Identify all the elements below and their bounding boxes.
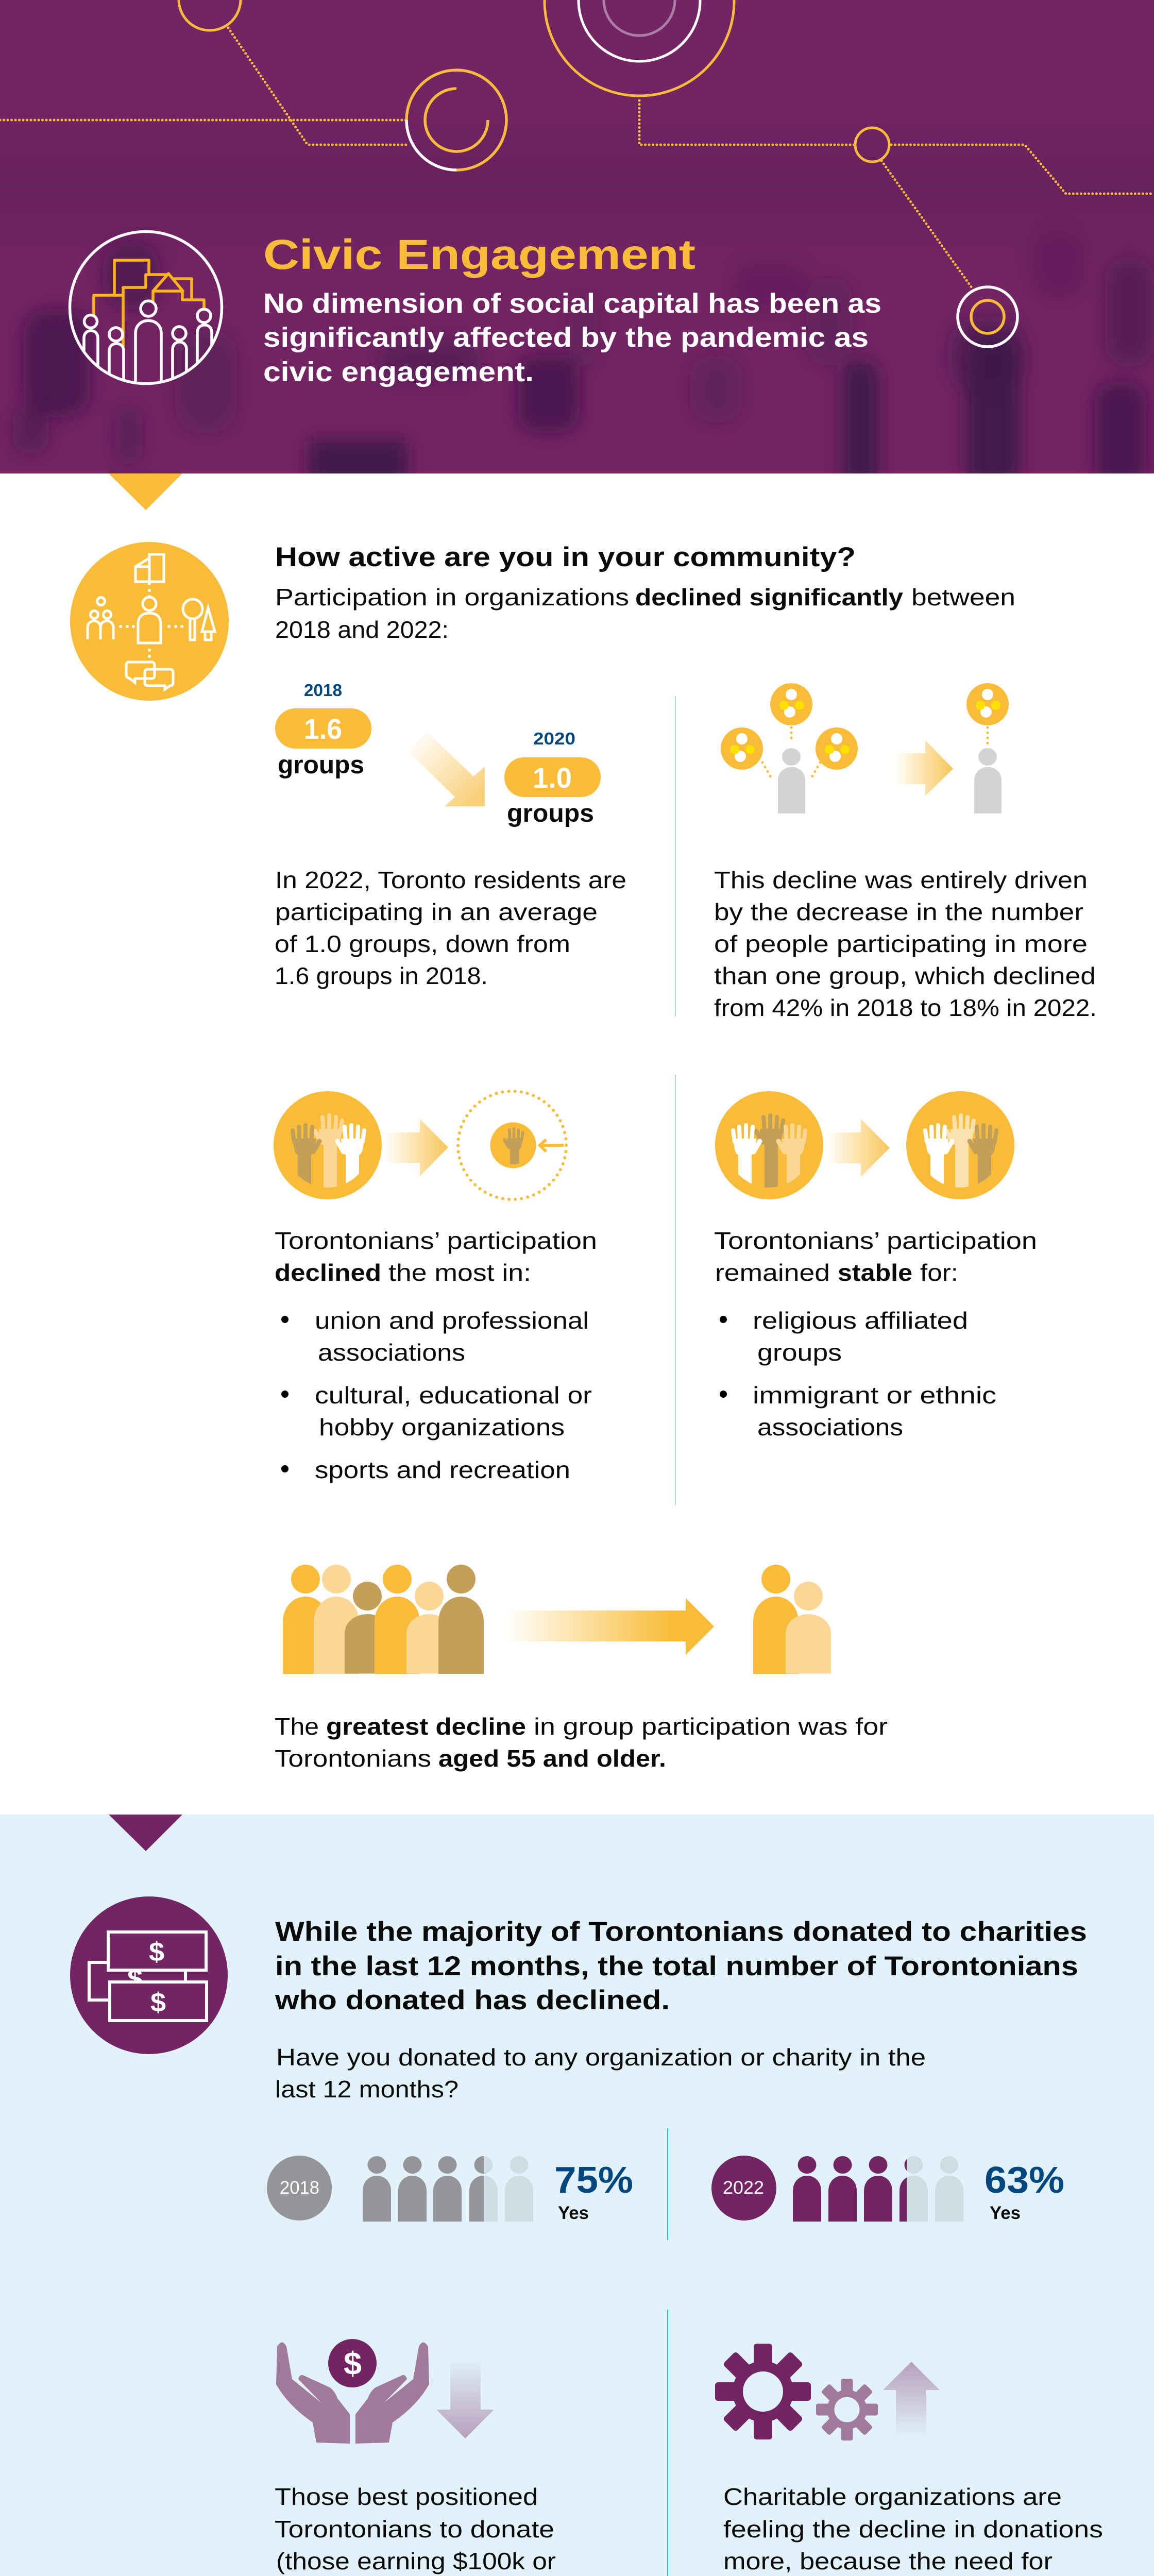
intro text: Participation in organizations [275,584,629,611]
text: decline driver: from 42% in 2018 to 18% in 2022. [714,994,1097,1021]
circle: top left [179,0,241,30]
intro text: between [911,584,1015,611]
chart: groups 2018 to 2020: 2020 [533,729,575,748]
text: greatest decline: aged 55 and older. [438,1745,666,1772]
panel: header [0,0,1154,495]
heading: While the majority of Torontonians donated to charities [275,1917,1087,1947]
marker: yellow triangle [109,473,182,510]
list: declined most: the most in: [388,1259,531,1286]
chart: groups 2018 to 2020: groups [278,751,364,779]
chart: groups 2018 to 2020: 2018 [304,681,342,700]
text: charitable organizations: feeling the decline in donations [723,2516,1103,2543]
list: remained stable: religious affiliated [753,1307,968,1334]
icon: money: $ [149,1937,164,1967]
subtitle: civic engagement. [263,357,534,387]
heading [275,1917,1087,2015]
list: remained stable: immigrant or ethnic [753,1382,996,1409]
text: average groups [275,867,626,989]
icon: hands declined [274,1091,566,1200]
intro text: declined significantly [635,584,903,611]
list: declined most: sports and recreation [315,1456,570,1483]
text: average groups: In 2022, Toronto residents are [275,867,626,893]
text: greatest decline [275,1713,888,1772]
chart: donated 2018 [267,2156,633,2223]
list: declined most: declined [275,1259,381,1286]
icon: gears with arrow [715,2344,940,2441]
list: remained stable: remained [715,1259,830,1286]
list: declined most: associations [318,1339,465,1366]
icon: money: $ [150,1988,166,2018]
chart: donated 2022: 2022 [723,2178,764,2198]
chart: donated 2022: 63% [985,2160,1064,2201]
text: best positioned [275,2483,606,2576]
chart: donated 2018: Yes [558,2203,589,2223]
marker: purple triangle [109,1815,182,1851]
text: charitable organizations: more, because the need for [723,2548,1053,2574]
list: remained stable [714,1227,1037,1440]
subtitle [263,288,881,387]
title: Civic Engagement [263,231,695,278]
question: donated: last 12 months? [275,2076,459,2103]
subtitle: significantly affected by the pandemic as [263,322,869,353]
list: declined most [275,1227,597,1483]
list: declined most: Torontonians’ participation [275,1227,597,1254]
chart: donated 2022 [711,2156,1064,2223]
intro text: 2018 and 2022: [275,616,449,643]
chart: groups 2018 to 2020 [275,681,601,827]
text: decline driver: This decline was entirely driven [714,867,1088,893]
list: remained stable: Torontonians’ participation [714,1227,1037,1254]
icon: community [70,542,229,701]
icon: people in groups [721,683,1009,814]
heading: How active are you in your community? [275,542,856,572]
chart: donated 2018: 75% [554,2160,633,2201]
chart: donated 2022: Yes [990,2203,1021,2223]
icon: hands with coin [276,2339,494,2444]
text: charitable organizations [723,2483,1104,2576]
list: declined most: hobby organizations [319,1414,565,1440]
spiral ring [406,70,506,170]
text: decline driver: than one group, which declined [714,962,1096,989]
panel: donations and volunteering [0,1815,1154,2576]
text: greatest decline: in group participation was for [534,1713,888,1740]
intro text [275,584,1015,643]
text: greatest decline: greatest decline [326,1713,526,1740]
icon: hands with coin: $ [344,2346,362,2382]
icon: hands stable [715,1091,1014,1200]
dotted connector lines [0,28,1154,287]
icon: city and people [70,232,222,392]
panel: community participation [70,542,1097,1772]
text: charitable organizations: Charitable organizations are [723,2483,1062,2510]
text: greatest decline: The [275,1713,319,1740]
text: decline driver: of people participating in more [714,930,1088,957]
subtitle: No dimension of social capital has been as [263,288,881,319]
question: donated: Have you donated to any organization or charity in the [276,2044,926,2071]
list: remained stable: associations [757,1414,903,1440]
text: best positioned: Those best positioned [275,2483,538,2510]
chart: donated 2018: 2018 [280,2178,319,2198]
text: greatest decline: Torontonians [275,1745,431,1772]
list: declined most: union and professional [315,1307,589,1334]
chart: groups 2018 to 2020: 1.0 [533,761,572,794]
list: remained stable: groups [757,1339,842,1366]
list: remained stable: stable [838,1259,912,1286]
chart: groups 2018 to 2020: 1.6 [304,713,342,745]
heading: in the last 12 months, the total number of Torontonians [275,1951,1078,1981]
chart: groups 2018 to 2020: groups [507,800,594,827]
icon: money [70,1896,228,2054]
question: donated [275,2044,926,2103]
concentric circles: top centre [545,0,734,96]
text: best positioned: Torontonians to donate [275,2516,554,2543]
text: average groups: of 1.0 groups, down from [275,930,570,957]
heading: who donated has declined. [275,1985,670,2015]
small ring [855,128,889,162]
text: average groups: participating in an average [275,899,598,925]
text: average groups: 1.6 groups in 2018. [275,962,488,989]
text: decline driver [714,867,1097,1021]
icon: group shrinking [283,1565,831,1674]
text: best positioned: (those earning $100k or [276,2548,556,2574]
icon: money: $ [127,1964,143,1994]
list: declined most: cultural, educational or [315,1382,592,1409]
list: remained stable: for: [920,1259,958,1286]
double ring [958,287,1017,347]
text: decline driver: by the decrease in the number [714,899,1083,925]
